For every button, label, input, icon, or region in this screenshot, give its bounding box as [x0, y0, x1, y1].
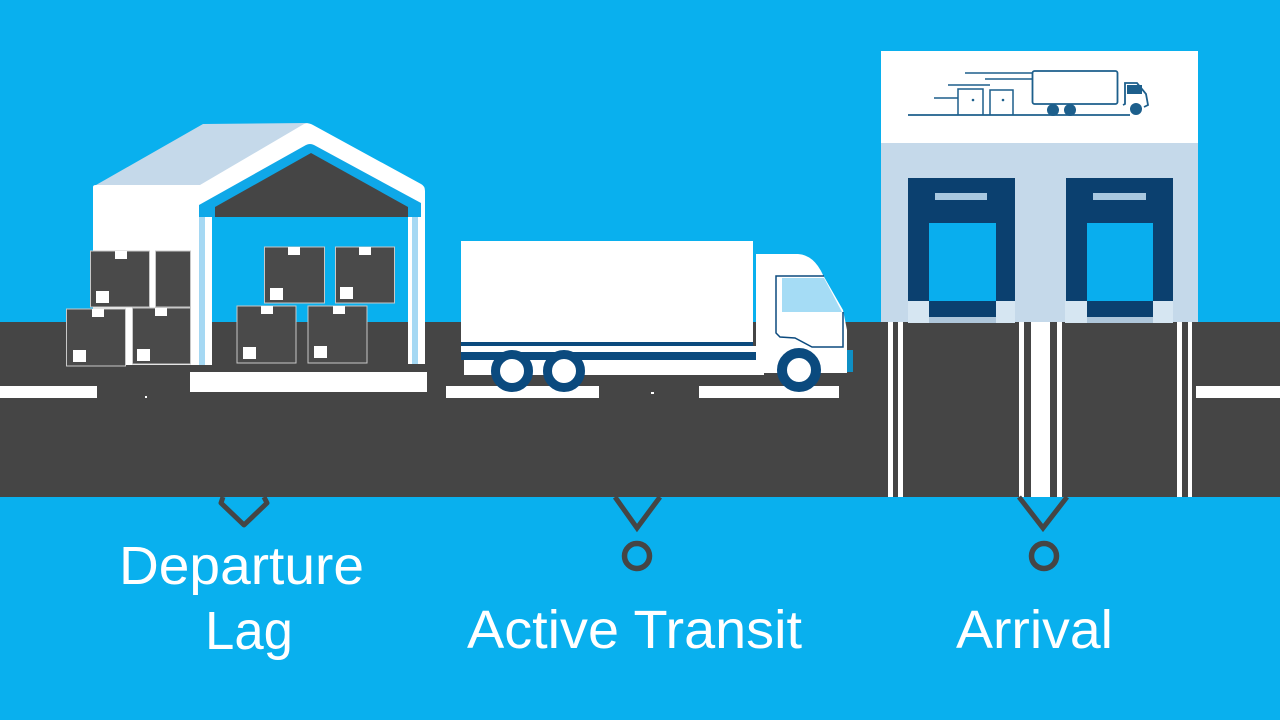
warehouse	[93, 123, 427, 392]
cargo box	[461, 241, 753, 342]
wheel	[548, 354, 580, 388]
warehouse floor slab	[190, 372, 427, 392]
dock sign panel	[881, 51, 1198, 143]
sign icon: truck leaving dock	[908, 71, 1148, 116]
label: Departure Lag	[119, 536, 364, 661]
stacked boxes	[66, 247, 394, 366]
warehouse right post	[408, 217, 425, 364]
box	[132, 308, 190, 364]
truck cab	[756, 254, 847, 373]
box	[90, 251, 150, 307]
road	[0, 322, 1280, 497]
arrival dock building	[881, 51, 1198, 323]
warehouse left post	[199, 217, 212, 365]
bumper	[847, 350, 853, 372]
box	[237, 306, 296, 363]
cab door outline	[776, 276, 843, 347]
label: Departure Lag: Lag	[205, 601, 293, 661]
warehouse opening	[212, 217, 408, 322]
dock lane markings	[888, 322, 1192, 497]
dock door left	[908, 178, 1015, 323]
box	[336, 247, 394, 303]
cab window	[782, 278, 842, 312]
label: Departure Lag: Departure	[119, 536, 364, 596]
marker: arrival	[1019, 497, 1067, 568]
box	[264, 247, 324, 303]
label: Arrival: Arrival	[956, 600, 1113, 660]
dock wall	[881, 143, 1198, 322]
wheel	[496, 354, 528, 388]
wheel	[782, 353, 816, 387]
marker: departure lag	[221, 497, 267, 525]
box	[156, 251, 190, 307]
warehouse dark gable	[215, 153, 408, 217]
warehouse roof side	[96, 123, 308, 186]
box	[66, 309, 126, 366]
warehouse blue eave	[199, 144, 421, 217]
box	[308, 306, 367, 363]
dock door right	[1065, 178, 1173, 323]
truck chassis stripes	[461, 342, 764, 375]
label: Active Transit: Active Transit	[467, 600, 802, 660]
warehouse white body	[93, 123, 425, 365]
marker: active transit	[615, 497, 660, 568]
delivery truck	[461, 241, 853, 388]
